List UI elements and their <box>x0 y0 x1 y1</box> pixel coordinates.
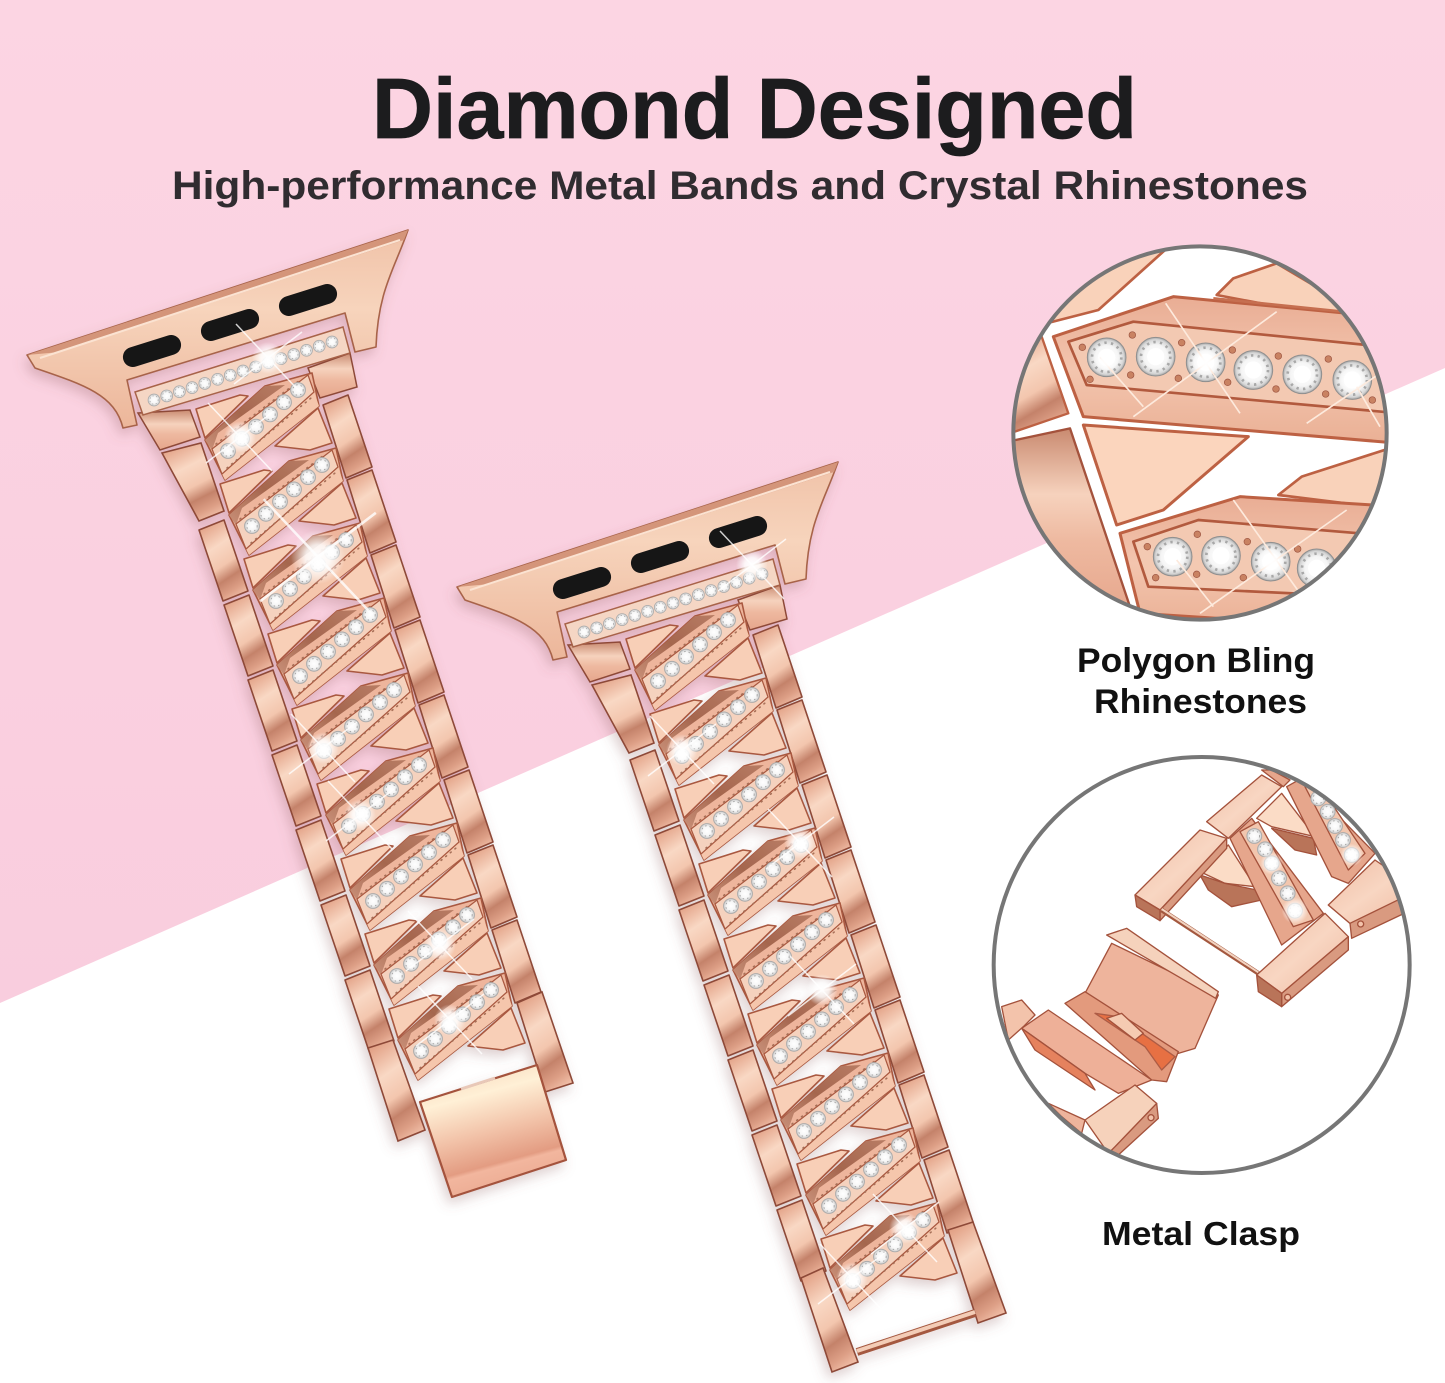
main crystal bar <box>1053 297 1400 443</box>
band 1 crystal X links <box>196 373 525 1080</box>
band 1 clasp cover <box>420 1065 566 1197</box>
upper right plate <box>1215 263 1338 310</box>
band 1 side links <box>199 395 573 1141</box>
label: polygon bling rhinestones: Polygon Bling <box>1077 642 1315 680</box>
link blocks <box>1160 838 1227 921</box>
lower crystal bar <box>1118 495 1371 618</box>
crystal bar one <box>1230 818 1323 945</box>
upper left plate <box>1051 252 1166 324</box>
left lower link <box>1015 427 1130 604</box>
band 2 side links <box>630 625 1006 1372</box>
title: Diamond Designed <box>372 62 1137 157</box>
clasp plate <box>1085 943 1218 1053</box>
label: metal clasp: Metal Clasp <box>1102 1215 1300 1252</box>
clasp end blocks <box>1108 1103 1158 1155</box>
left upper link <box>1015 336 1070 433</box>
middle plate <box>1083 425 1248 525</box>
label: polygon bling rhinestones: Rhinestones <box>1094 683 1307 721</box>
crystal bar two <box>1287 778 1375 883</box>
detail circle: polygon bling rhinestones <box>1000 243 1400 630</box>
setting studs <box>1079 332 1376 581</box>
detail circle: metal clasp <box>994 757 1418 1173</box>
lower plate <box>1277 448 1384 504</box>
band 1 top connector with pin slots and crystal strip <box>27 230 408 521</box>
light wedges <box>1200 845 1255 887</box>
sparkles on the crystals <box>206 324 939 1312</box>
watch band: right, open end <box>457 462 1006 1372</box>
band 2 crystal X links <box>626 603 957 1310</box>
band 2 top connector with pin slots and crystal strip <box>457 462 838 753</box>
background: pink diagonal panel <box>0 0 1445 1003</box>
crystals on clasp links <box>1247 791 1363 924</box>
light glints <box>1100 303 1380 613</box>
spring bar pin <box>1162 910 1258 973</box>
subtitle: High-performance Metal Bands and Crystal Rhinestones <box>172 164 1308 208</box>
watch band: left, with clasp cover <box>27 230 573 1197</box>
rhinestones <box>1087 337 1372 588</box>
band 2 spring bar <box>857 1312 975 1352</box>
clasp hinge <box>1065 992 1178 1082</box>
label: polygon bling rhinestones <box>1077 642 1315 721</box>
clasp lower plate <box>1022 1010 1152 1093</box>
